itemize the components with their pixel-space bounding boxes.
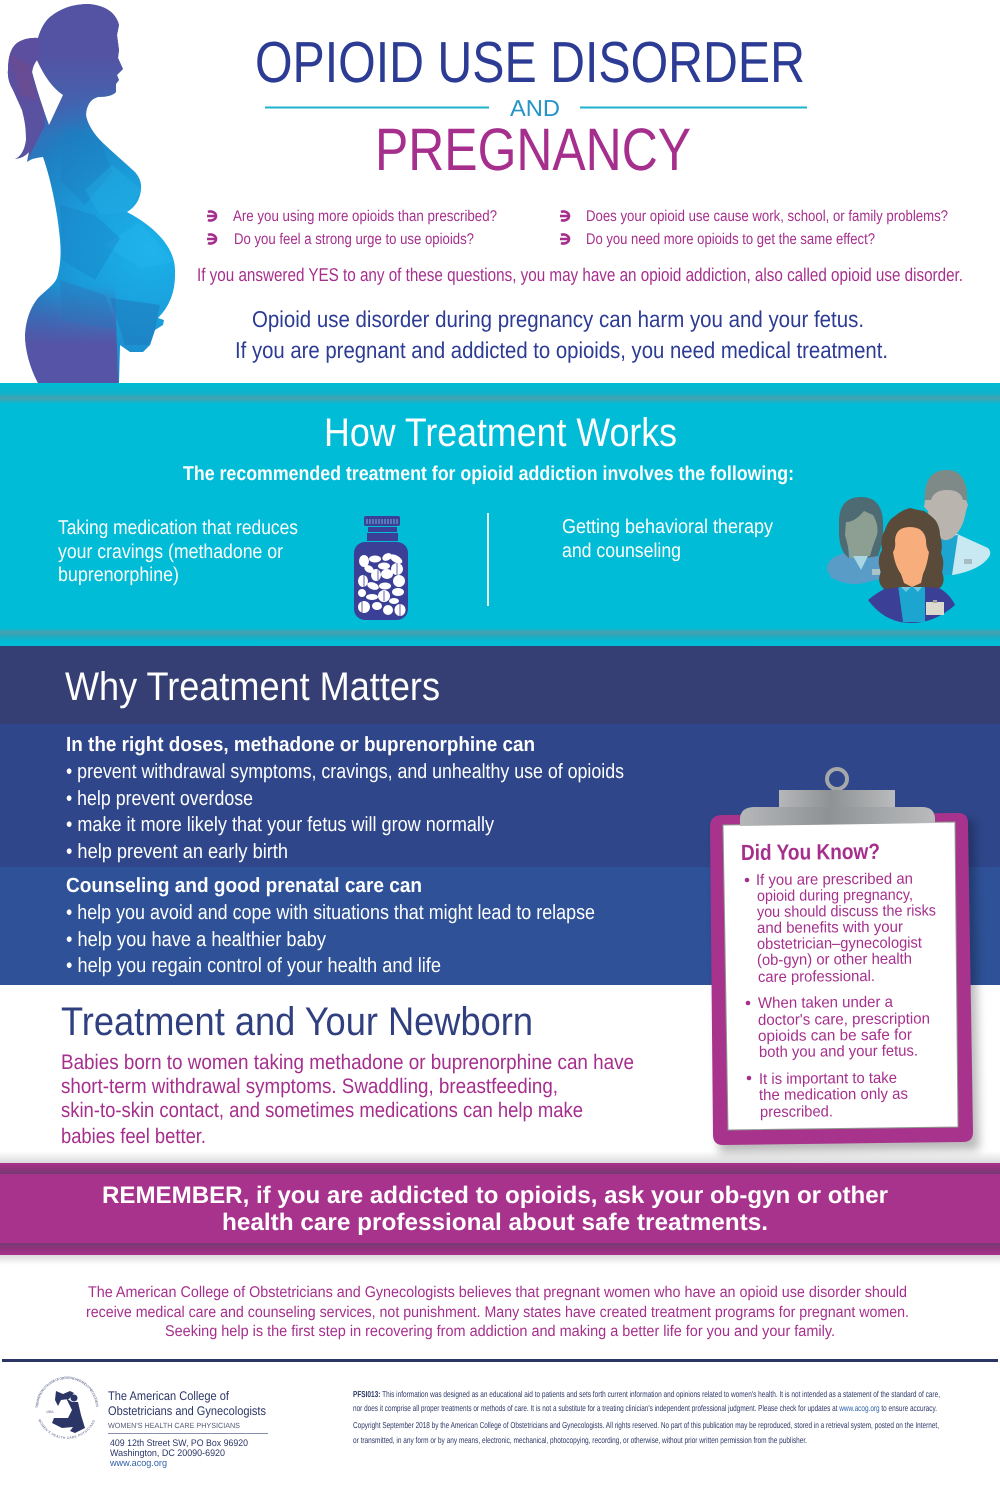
counseling benefits list: • help you have a healthier baby — [66, 928, 327, 951]
icon: ACOG seal: THE AMERICAN COLLEGE OF OBSTETRICIANS AND GYNECOLOGISTS — [36, 1376, 98, 1408]
clipboard bullets: doctor's care, prescription — [758, 1010, 930, 1029]
divider — [487, 513, 489, 606]
clipboard bullets: (ob-gyn) or other health — [757, 951, 912, 969]
legal fine print — [353, 1389, 940, 1445]
icon: ACOG seal: 1951 — [46, 1410, 54, 1414]
title — [255, 30, 807, 183]
clipboard bullets: It is important to take — [759, 1070, 897, 1088]
medication benefits list: In the right doses, methadone or buprenorphine can — [66, 733, 535, 756]
screening questions: Do you feel a strong urge to use opioids? — [234, 231, 474, 248]
newborn paragraph — [61, 1051, 634, 1148]
counseling benefits list — [66, 874, 595, 977]
panel: did you know clipboard — [710, 769, 979, 1153]
ACOG name and address: The American College of — [108, 1389, 229, 1403]
clipboard bullets: opioid during pregnancy, — [757, 887, 913, 905]
counseling benefits list: • help you avoid and cope with situations that might lead to relapse — [66, 901, 595, 924]
clipboard paper — [723, 822, 958, 1130]
clipboard bullets: both you and your fetus. — [759, 1043, 918, 1061]
clipboard bullets: care professional. — [758, 968, 875, 986]
newborn paragraph: babies feel better. — [61, 1125, 206, 1148]
clipboard bullets: When taken under a — [758, 994, 893, 1012]
key message — [235, 306, 888, 363]
heading: Why Treatment Matters — [65, 665, 440, 709]
medication text — [58, 517, 298, 586]
medication text: buprenorphine) — [58, 564, 179, 586]
clipboard clip — [740, 769, 935, 826]
closing statement — [86, 1284, 909, 1340]
icon: pill bottle — [354, 516, 408, 620]
panel: why treatment matters — [0, 646, 1000, 985]
clipboard board — [710, 813, 973, 1145]
clipboard bullets: opioids can be safe for — [758, 1027, 912, 1045]
medication benefits list: • help prevent overdose — [66, 787, 253, 810]
medication benefits list — [66, 733, 624, 863]
heading: How Treatment Works — [324, 411, 677, 455]
panel: remember banner — [0, 1151, 1000, 1265]
therapy text — [562, 516, 773, 562]
medication benefits list: • help prevent an early birth — [66, 840, 288, 863]
woman on left — [827, 497, 884, 584]
clipboard bullets: obstetrician–gynecologist — [757, 935, 923, 953]
woman in front — [868, 508, 955, 623]
title: PREGNANCY — [375, 116, 691, 183]
ACOG name and address: Obstetricians and Gynecologists — [108, 1404, 266, 1418]
man in back — [924, 470, 990, 575]
newborn paragraph: skin-to-skin contact, and sometimes medications can help make — [61, 1099, 583, 1122]
medication benefits list: • prevent withdrawal symptoms, cravings, and unhealthy use of opioids — [66, 760, 624, 783]
closing statement: receive medical care and counseling services, not punishment. Many states have created treatment programs for pregnant women. — [86, 1304, 909, 1321]
icon: arrow bullet — [207, 212, 217, 220]
screening questions: Are you using more opioids than prescribed? — [233, 208, 497, 225]
icon: ACOG seal — [36, 1376, 98, 1439]
key message: Opioid use disorder during pregnancy can harm you and your fetus. — [252, 306, 864, 332]
legal fine print: nor does it comprise all proper treatments or methods of care. It is not a substitute for a treating clinician's independent professional judgment. Please check for updates at www.acog.org to ensure accuracy. — [353, 1403, 937, 1413]
closing statement: Seeking help is the first step in recovering from addiction and making a better life for you and your family. — [165, 1323, 835, 1340]
screening questions — [207, 208, 948, 248]
ACOG name and address: 409 12th Street SW, PO Box 96920 — [110, 1438, 248, 1449]
ACOG name and address — [108, 1389, 268, 1469]
heading: treatment and your newborn: Treatment and Your Newborn — [61, 1000, 533, 1044]
legal fine print: or transmitted, in any form or by any means, electronic, mechanical, photocopying, recording, or otherwise, without prior written permission from the publisher. — [353, 1435, 807, 1445]
icon: pregnant woman silhouette — [0, 0, 180, 384]
medication text: Taking medication that reduces — [58, 517, 298, 539]
clipboard bullets: prescribed. — [760, 1103, 833, 1121]
clipboard heading: Did You Know? — [741, 839, 880, 865]
icon: ACOG seal: WOMEN'S HEALTH CARE PHYSICIANS — [38, 1418, 95, 1439]
title: OPIOID USE DISORDER — [255, 30, 805, 95]
clipboard bullets: and benefits with your — [757, 919, 903, 937]
ACOG name and address: www.acog.org — [109, 1458, 167, 1469]
clipboard bullets: If you are prescribed an — [756, 871, 913, 889]
icon: health care team — [827, 470, 990, 623]
medication text: your cravings (methadone or — [58, 541, 283, 563]
subheading: The recommended treatment for opioid addiction involves the following: — [183, 463, 794, 485]
therapy text: Getting behavioral therapy — [562, 516, 773, 538]
panel: remember banner: REMEMBER, if you are addicted to opioids, ask your ob-gyn or other — [102, 1182, 888, 1209]
clipboard bullets: you should discuss the risks — [757, 902, 936, 921]
newborn paragraph: Babies born to women taking methadone or buprenorphine can have — [61, 1051, 634, 1074]
medication benefits list: • make it more likely that your fetus will grow normally — [66, 813, 495, 836]
ACOG name and address: Washington, DC 20090-6920 — [110, 1448, 225, 1459]
clipboard bullets — [745, 871, 936, 1121]
panel: remember banner: health care professional about safe treatments. — [222, 1209, 768, 1236]
key message: If you are pregnant and addicted to opioids, you need medical treatment. — [235, 337, 888, 363]
screening questions: Do you need more opioids to get the same effect? — [586, 231, 875, 248]
counseling benefits list: Counseling and good prenatal care can — [66, 874, 422, 897]
newborn paragraph: short-term withdrawal symptoms. Swaddling, breastfeeding, — [61, 1075, 558, 1098]
panel: how treatment works — [0, 383, 1000, 646]
screening questions: Does your opioid use cause work, school, or family problems? — [586, 208, 948, 225]
therapy text: and counseling — [562, 540, 681, 562]
ACOG name and address: WOMEN'S HEALTH CARE PHYSICIANS — [108, 1421, 240, 1430]
closing statement: The American College of Obstetricians and Gynecologists believes that pregnant women who have an opioid use disorder should — [88, 1284, 907, 1301]
title: AND — [510, 95, 560, 121]
counseling benefits list: • help you regain control of your health and life — [66, 954, 441, 977]
clipboard bullets: the medication only as — [759, 1086, 908, 1104]
